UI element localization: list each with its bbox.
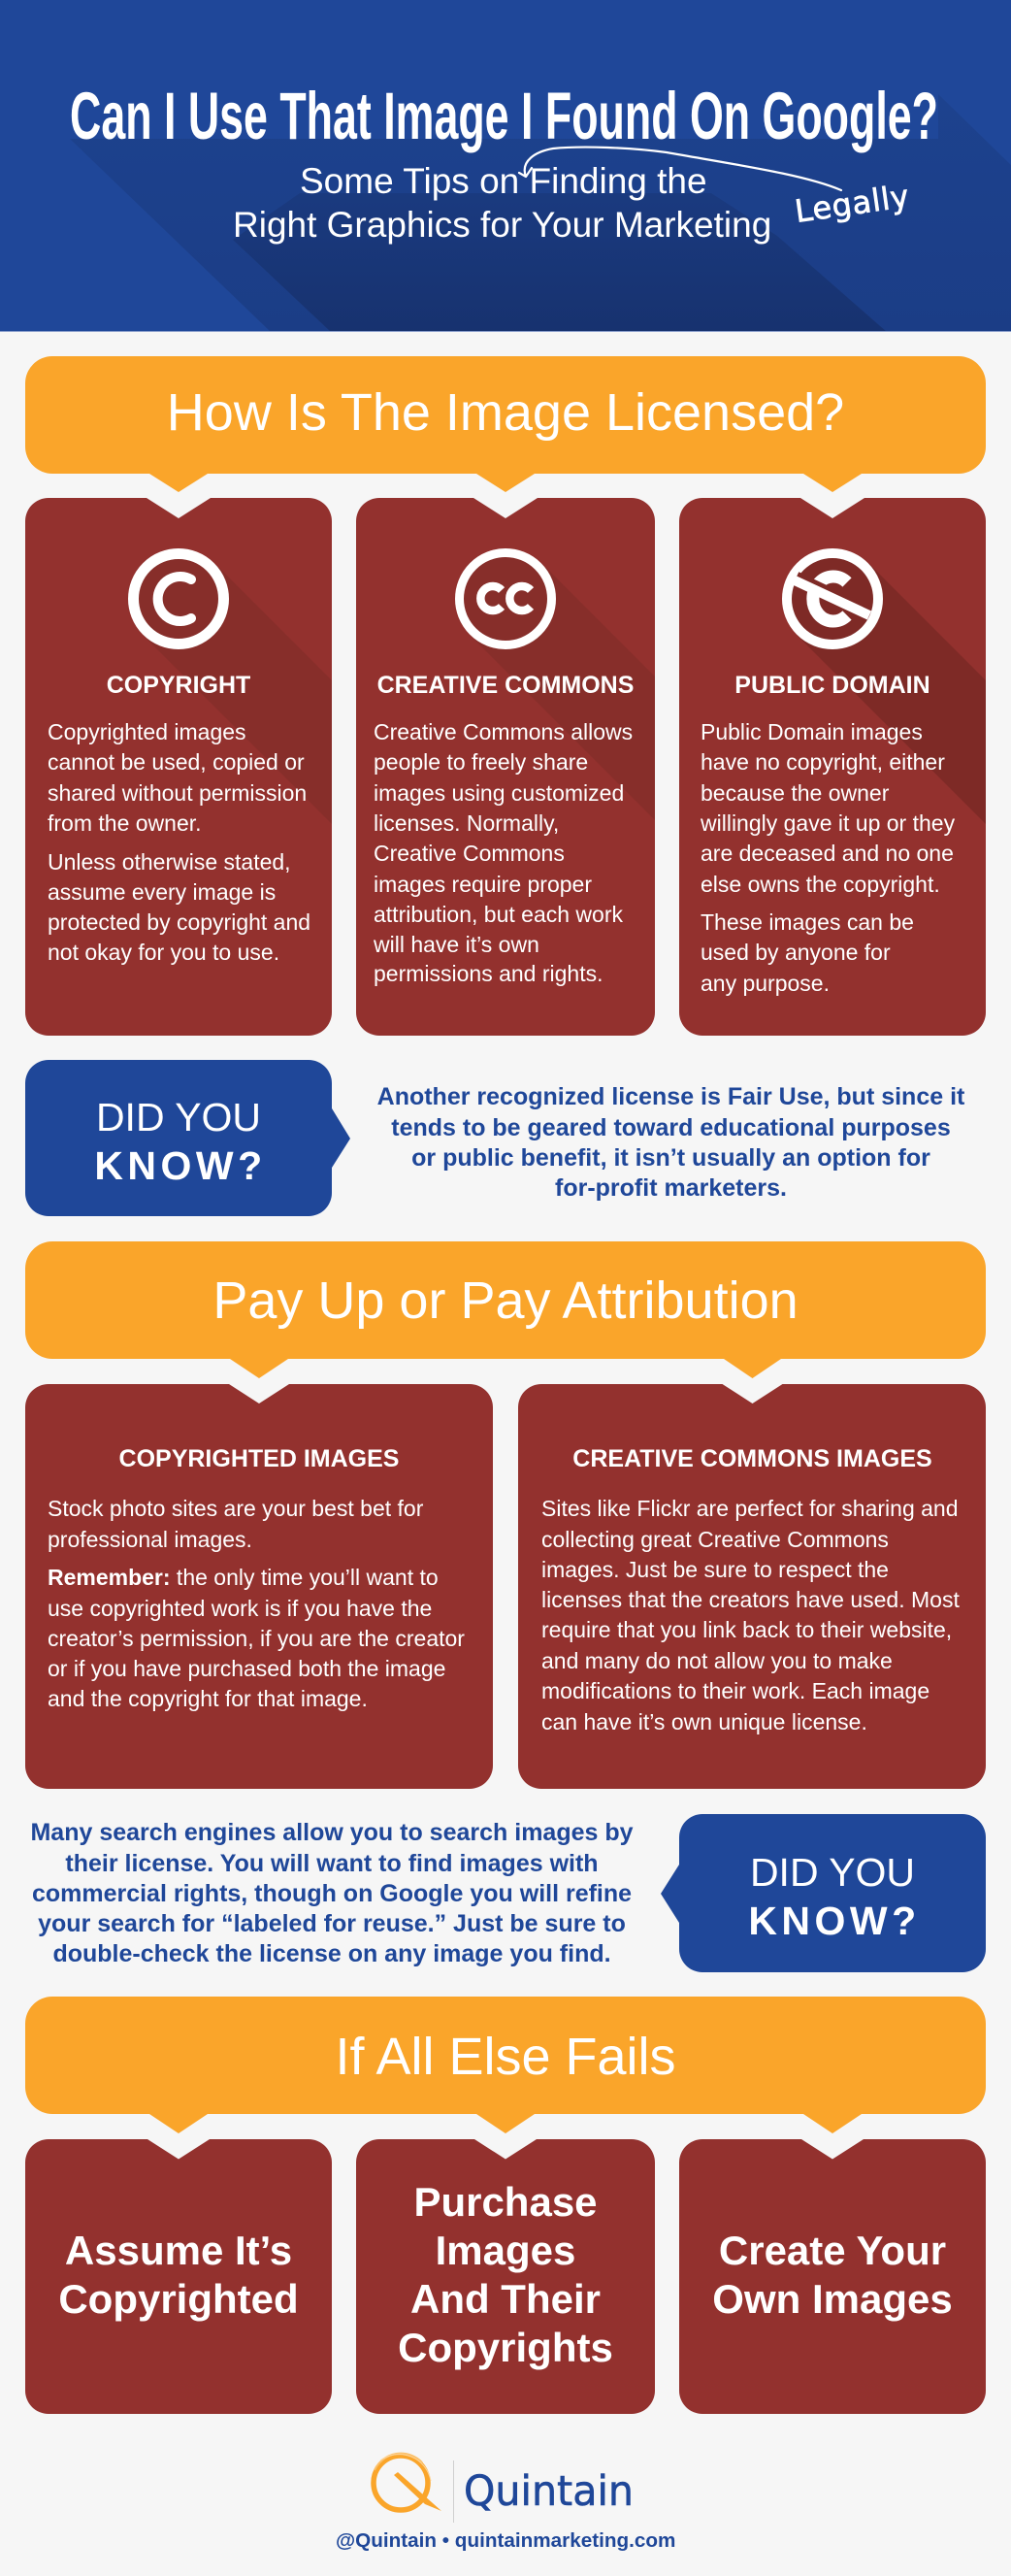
copyrighted images text: professional images. [48,1527,252,1552]
panel: purchase images: Copyrights [398,2325,613,2370]
callout: did you know 1: DID YOU [96,1095,261,1139]
public domain text: These images can be [701,909,914,935]
text block: search engines: commercial rights, though on Google you will refine [32,1880,632,1907]
public domain text: are deceased and no one [701,841,954,866]
public domain text: have no copyright, either [701,749,945,775]
icon: Q mark [374,2454,441,2511]
callout: did you know 2: DID YOU [750,1850,915,1895]
handwritten arrow [519,148,841,190]
creative commons text: permissions and rights. [374,961,603,986]
public domain text: else owns the copyright. [701,872,940,897]
callout: did you know 1: KNOW? [94,1143,267,1188]
copyrighted images text [48,1496,465,1711]
section banner: If All Else Fails: If All Else Fails [335,2028,676,2086]
panel: create your own: Create Your [719,2228,946,2273]
public domain text: any purpose. [701,971,830,996]
footer credits: @Quintain • quintainmarketing.com [336,2529,675,2552]
heading: public domain: PUBLIC DOMAIN [734,672,930,699]
public domain text: Public Domain images [701,719,923,744]
subtitle: Right Graphics for Your Marketing [233,205,771,245]
icon: copyright [134,553,223,644]
text block: fair use: or public benefit, it isn’t usually an option for [411,1144,930,1172]
panel: assume copyrighted: Assume It’s [65,2228,292,2273]
heading: creative commons: CREATIVE COMMONS [377,672,634,699]
panel: copyrighted images [25,1384,493,1789]
section banner: How Is The Image Licensed: How Is The Image Licensed? [167,383,844,442]
creative commons images text: and many do not allow you to make [541,1648,893,1673]
copyright text [48,719,310,965]
copyright text: protected by copyright and [48,909,310,935]
creative commons text: Creative Commons [374,841,565,866]
creative commons images text: images. Just be sure to respect the [541,1557,889,1582]
subtitle: Some Tips on Finding the [300,161,707,201]
creative commons images text: require that you link back to their website, [541,1617,952,1642]
copyright text: from the owner. [48,810,202,836]
section banner: Pay Up or Pay Attribution [25,1241,986,1378]
section banner: How Is The Image Licensed [25,356,986,492]
creative commons images text [541,1496,960,1734]
panel: create your own [679,2139,986,2414]
creative commons images text: can have it’s own unique license. [541,1709,867,1734]
public domain text: willingly gave it up or they [700,810,956,836]
callout: did you know 2 [661,1814,986,1972]
panel: assume copyrighted [25,2139,332,2414]
creative commons text: images require proper [374,872,592,897]
panel: copyright [25,498,332,1036]
icon: creative commons [460,553,551,644]
callout: did you know 2: KNOW? [748,1899,921,1943]
copyright text: not okay for you to use. [48,940,279,965]
copyrighted images text: creator’s permission, if you are the creator [48,1626,465,1651]
creative commons text: people to freely share [374,749,588,775]
text block: search engines [30,1819,634,1967]
text block: search engines: their license. You will want to find images with [65,1850,599,1877]
text block: fair use: tends to be geared toward educational purposes [391,1114,951,1141]
creative commons images text: modifications to their work. Each image [541,1678,929,1703]
heading: copyright: COPYRIGHT [107,672,250,699]
icon: public domain [787,553,878,644]
panel: creative commons [356,498,655,1036]
section banner: If All Else Fails [25,1997,986,2133]
panel: purchase images [356,2139,655,2414]
copyright text: assume every image is [48,879,276,905]
copyrighted images text: use copyrighted work is if you have the [48,1596,432,1621]
text block: fair use [377,1083,965,1202]
text block: fair use: Another recognized license is Fair Use, but since it [377,1083,965,1110]
panel: public domain [679,498,1011,1036]
public domain text [700,719,956,996]
copyright text: shared without permission [48,780,307,806]
panel: create your own: Own Images [712,2276,953,2322]
copyrighted images text: Remember: the only time you’ll want to [48,1565,439,1590]
creative commons images text: Sites like Flickr are perfect for sharing and [541,1496,959,1521]
public domain text: because the owner [701,780,890,806]
creative commons text: will have it’s own [373,932,539,957]
text block: search engines: double-check the license on any image you find. [52,1940,611,1967]
public domain text: used by anyone for [701,940,891,965]
subtitle [233,161,771,245]
panel: assume copyrighted: Copyrighted [58,2276,299,2322]
text block: search engines: Many search engines allow you to search images by [30,1819,634,1846]
creative commons text [373,719,633,986]
creative commons text: attribution, but each work [374,902,623,927]
callout: did you know 1 [25,1060,350,1216]
copyright text: Unless otherwise stated, [48,849,291,875]
creative commons images text: collecting great Creative Commons [541,1527,889,1552]
text block: fair use: for-profit marketers. [555,1174,787,1202]
copyright text: Copyrighted images [48,719,246,744]
heading: copyrighted images: COPYRIGHTED IMAGES [119,1445,399,1472]
section banner: Pay Up or Pay Attribution: Pay Up or Pay Attribution [212,1271,799,1330]
heading: creative commons images: CREATIVE COMMONS IMAGES [572,1445,932,1472]
creative commons text: Creative Commons allows [374,719,633,744]
creative commons images text: licenses that the creators have used. Most [541,1587,960,1612]
copyrighted images text: Stock photo sites are your best bet for [48,1496,424,1521]
text block: search engines: your search for “labeled for reuse.” Just be sure to [38,1910,626,1937]
panel: purchase images: And Their [410,2276,601,2322]
handwritten word: Legally: Legally [793,178,911,230]
header banner [0,0,1011,332]
panel: creative commons images [518,1384,986,1789]
logo: Quintain [374,2454,634,2523]
panel: purchase images: Purchase [413,2179,598,2225]
copyrighted images text: or if you have purchased both the image [48,1656,445,1681]
logo: Quintain: Quintain [464,2467,634,2516]
panel: purchase images: Images [436,2228,575,2273]
creative commons text: licenses. Normally, [374,810,559,836]
creative commons text: images using customized [374,780,624,806]
copyright text: cannot be used, copied or [48,749,305,775]
copyrighted images text: and the copyright for that image. [48,1686,368,1711]
